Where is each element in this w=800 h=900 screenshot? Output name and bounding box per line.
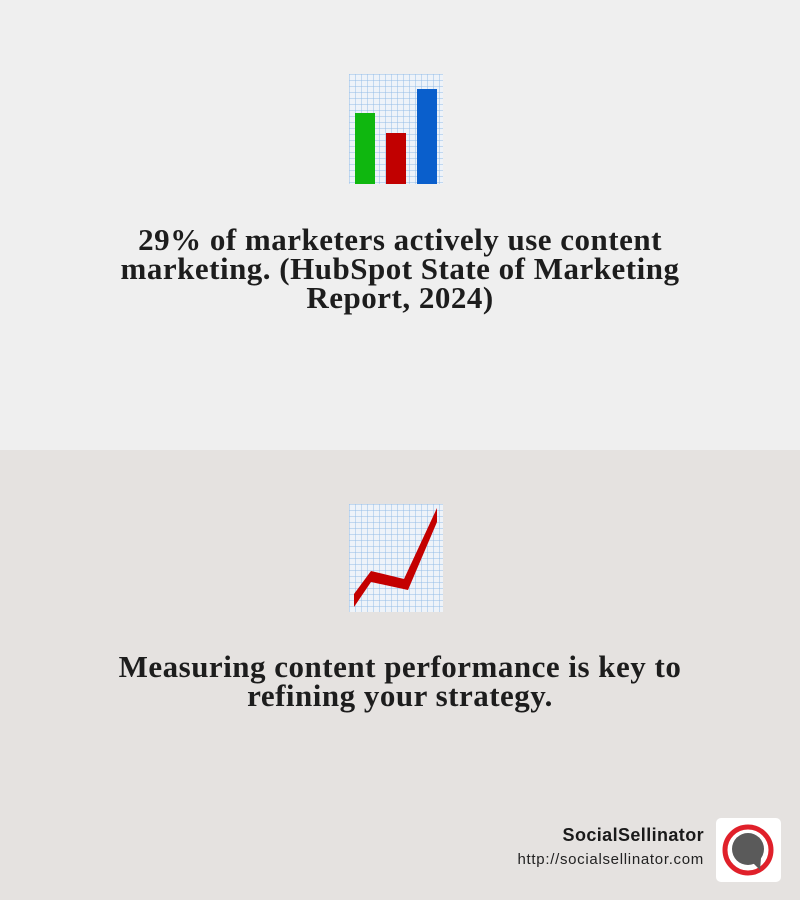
brand url: http://socialsellinator.com (518, 851, 704, 868)
text: measuring: refining your strategy. (247, 678, 553, 713)
panel: bottom section (0, 450, 800, 900)
icon: bar chart (349, 74, 443, 184)
branding (518, 825, 704, 868)
text: measuring (119, 649, 681, 713)
text: measuring: Measuring content performance is key to (119, 649, 681, 684)
text: statistic (121, 222, 679, 315)
text: statistic: Report, 2024) (306, 280, 494, 315)
text: statistic: marketing. (HubSpot State of Marketing (121, 251, 679, 286)
icon: line chart (349, 504, 443, 612)
brand name: SocialSellinator (563, 825, 704, 845)
panel: top section (0, 0, 800, 450)
icon: logo (716, 818, 781, 882)
text: statistic: 29% of marketers actively use content (138, 222, 662, 257)
